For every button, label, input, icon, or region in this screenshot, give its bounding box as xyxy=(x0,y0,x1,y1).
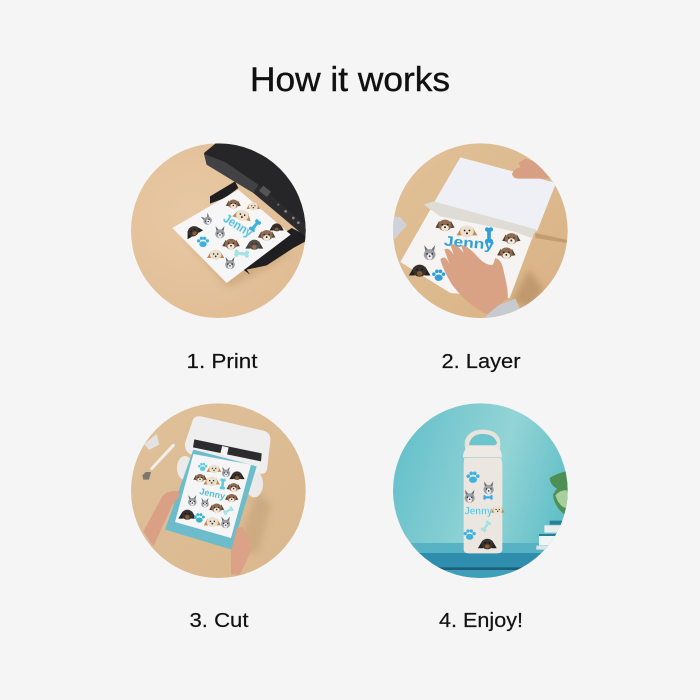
printer tray xyxy=(210,181,238,204)
Jenny sticker lettering: Jenny xyxy=(464,506,493,518)
step 1 label: 1. Print xyxy=(186,350,258,373)
step 2 label: 2. Layer xyxy=(442,350,521,373)
bottle handle xyxy=(465,430,500,457)
tools on table xyxy=(144,434,159,450)
bottle lid xyxy=(463,445,502,457)
books xyxy=(550,521,564,525)
printer body xyxy=(204,143,312,238)
bottle body xyxy=(464,458,502,553)
Jenny sticker lettering: Jenny xyxy=(199,486,226,501)
mat shadow xyxy=(244,495,270,552)
step 2 image: layering transfer sheet xyxy=(393,143,568,318)
bottle stickers xyxy=(466,472,480,483)
step 4 image: stickered bottle on shelf xyxy=(393,403,568,578)
right hand and arm xyxy=(231,527,251,575)
infographic canvas xyxy=(131,66,568,632)
Jenny sticker lettering: Jenny xyxy=(221,211,255,240)
sticker sheet xyxy=(172,190,291,283)
paper shadow xyxy=(187,244,288,287)
shadow on table xyxy=(512,270,544,308)
shelf xyxy=(410,543,550,554)
step 3 image: cutting machine xyxy=(131,403,306,578)
step 1 image: printer printing sticker sheet xyxy=(131,143,306,318)
machine feet xyxy=(177,456,190,480)
plant xyxy=(550,471,568,514)
cutting mat xyxy=(165,450,257,550)
control panel xyxy=(254,192,306,234)
folded transfer sheet xyxy=(434,157,556,231)
sleeve xyxy=(486,298,520,318)
machine body xyxy=(185,416,270,474)
step 4 label: 4. Enjoy! xyxy=(439,609,523,632)
white sheet on mat xyxy=(175,454,251,538)
upper hand xyxy=(512,159,550,179)
Jenny sticker lettering: Jenny xyxy=(443,232,495,253)
step 3 label: 3. Cut xyxy=(190,609,249,632)
hand on sheet xyxy=(440,244,508,315)
title: How it works xyxy=(250,61,450,99)
tablet corner xyxy=(393,216,407,239)
sticker sheet xyxy=(400,210,534,298)
teal wall xyxy=(393,403,568,578)
left hand and arm xyxy=(143,491,180,546)
